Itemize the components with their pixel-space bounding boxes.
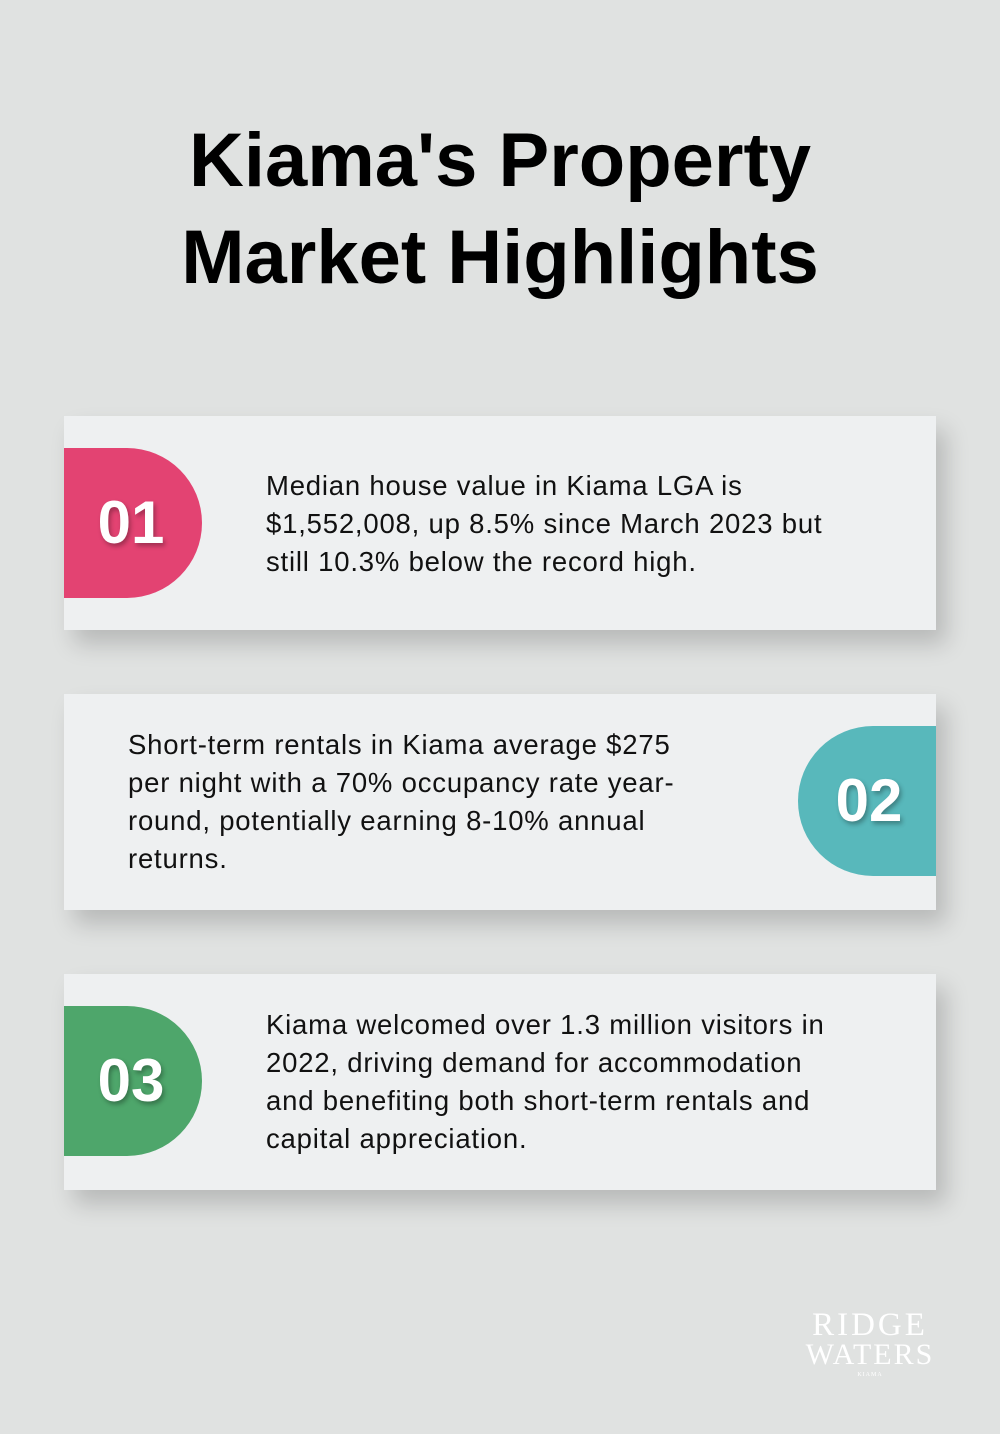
text 3: capital appreciation. <box>266 1123 527 1154</box>
card 3 <box>64 974 936 1190</box>
text 3: Kiama welcomed over 1.3 million visitors in <box>266 1009 825 1040</box>
badge 03: 03 <box>98 1047 164 1114</box>
card 1 <box>64 416 936 630</box>
logo: WATERS <box>806 1338 934 1371</box>
text 1: still 10.3% below the record high. <box>266 546 697 577</box>
badge 03 <box>64 1006 202 1156</box>
text 2: returns. <box>128 843 228 874</box>
logo: KIAMA <box>857 1372 883 1378</box>
text 3 <box>266 1009 825 1154</box>
logo: RIDGE <box>812 1307 928 1343</box>
text 2 <box>128 729 674 874</box>
text 2: Short-term rentals in Kiama average $275 <box>128 729 671 760</box>
badge 02 <box>798 726 936 876</box>
logo <box>806 1307 934 1378</box>
title: Market Highlights <box>181 215 819 300</box>
badge 01: 01 <box>98 489 164 556</box>
text 3: and benefiting both short-term rentals and <box>266 1085 810 1116</box>
text 1: Median house value in Kiama LGA is <box>266 470 743 501</box>
title <box>181 118 819 300</box>
title: Kiama's Property <box>189 118 811 203</box>
badge 01 <box>64 448 202 598</box>
text 3: 2022, driving demand for accommodation <box>266 1047 802 1078</box>
badge 02: 02 <box>836 767 902 834</box>
text 2: per night with a 70% occupancy rate year- <box>128 767 674 798</box>
text 2: round, potentially earning 8-10% annual <box>128 805 645 836</box>
text 1 <box>266 470 822 577</box>
text 1: $1,552,008, up 8.5% since March 2023 but <box>266 508 822 539</box>
card 2 <box>64 694 936 910</box>
